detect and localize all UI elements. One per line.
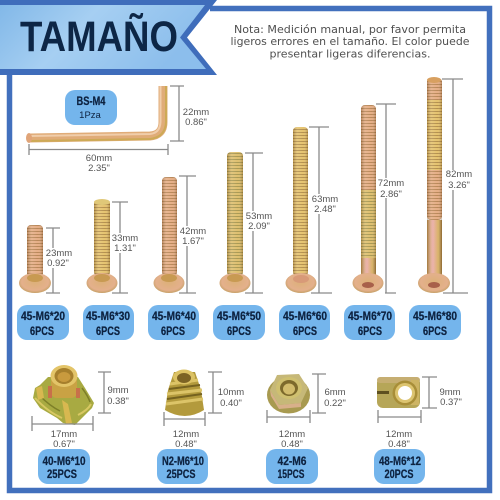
label: N2-M6*10 [157, 449, 208, 484]
dimension cross dowel: 0.48" [388, 439, 410, 450]
label: 45-M6*40 [148, 305, 199, 340]
label: BS-M4: BS-M4 [76, 94, 106, 108]
dimension flange nut [267, 374, 346, 450]
dimension flange nut: 0.48" [281, 439, 303, 450]
label: 45-M6*30 [83, 305, 134, 340]
label: 45-M6*30: 6PCS [96, 324, 120, 338]
label: 45-M6*40: 6PCS [161, 324, 185, 338]
dimension 82mm [442, 79, 473, 293]
dimension 53mm: 2.09" [248, 221, 270, 232]
note text: Nota: Medición manual, por favor permita [234, 24, 466, 36]
label: 45-M6*50 [213, 305, 265, 340]
dimension insert: 10mm [218, 387, 244, 398]
bolt 45-M6*80 [418, 77, 450, 293]
dimension T-nut: 0.67" [53, 439, 75, 450]
dimension T-nut [32, 372, 129, 450]
dimension cross dowel: 12mm [386, 429, 412, 440]
bolt 45-M6*20 [19, 225, 51, 293]
label: 40-M6*10 [38, 449, 90, 484]
bolt 45-M6*40 [154, 177, 184, 293]
icon: cross dowel [377, 377, 420, 408]
dimension 53mm [245, 153, 272, 293]
dimension 23mm [46, 228, 72, 293]
label: 45-M6*30: 45-M6*30 [86, 309, 130, 323]
dimension 82mm: 3.26" [448, 180, 470, 191]
dimension flange nut: 6mm [324, 387, 346, 398]
dimension cross dowel [378, 377, 462, 450]
dimension flange nut: 12mm [279, 429, 305, 440]
label: 45-M6*70: 6PCS [358, 324, 382, 338]
dimension 63mm: 2.48" [314, 204, 336, 215]
dimension: hex key: 2.35" [88, 163, 110, 174]
bolt 45-M6*60 [286, 127, 316, 293]
note text: presentar ligeras diferencias. [270, 48, 430, 60]
label: 45-M6*60: 45-M6*60 [283, 309, 327, 323]
dimension insert: 12mm [173, 429, 199, 440]
dimension: hex key: 60mm [86, 153, 112, 164]
dimension flange nut: 0.22" [324, 398, 346, 409]
label: 40-M6*10: 40-M6*10 [42, 454, 86, 468]
label: 45-M6*20: 45-M6*20 [21, 309, 65, 323]
bolt 45-M6*50 [220, 152, 250, 293]
label: 45-M6*70 [344, 305, 395, 340]
bolt 45-M6*30 [86, 199, 118, 293]
label: 42-M6: 15PCS [278, 467, 304, 481]
title: TAMAÑO [20, 13, 178, 61]
label: 45-M6*50: 6PCS [227, 324, 251, 338]
dimension 53mm: 53mm [246, 211, 272, 222]
label: 45-M6*70: 45-M6*70 [348, 309, 392, 323]
dimension T-nut: 0.38" [107, 396, 129, 407]
label: 45-M6*20: 6PCS [30, 324, 54, 338]
label: BS-M4 [65, 90, 117, 125]
dimension 72mm: 72mm [378, 178, 404, 189]
dimension T-nut: 17mm [51, 429, 77, 440]
dimension 33mm: 33mm [112, 233, 138, 244]
dimension: hex key [29, 86, 209, 174]
icon: threaded insert [165, 370, 204, 416]
dimension: hex key: 22mm [183, 107, 209, 118]
banner [0, 0, 217, 75]
label: 45-M6*20 [17, 305, 69, 340]
label: 42-M6: 42-M6 [278, 454, 307, 468]
label: N2-M6*10: 25PCS [166, 467, 196, 481]
dimension 42mm [179, 176, 206, 293]
dimension insert: 0.40" [220, 398, 242, 409]
dimension 42mm: 42mm [180, 226, 206, 237]
icon: hex key [26, 86, 166, 143]
dimension 42mm: 1.67" [182, 236, 204, 247]
dimension: hex key: 0.86" [185, 117, 207, 128]
label: 48-M6*12: 20PCS [384, 467, 414, 481]
dimension 23mm: 23mm [46, 248, 72, 259]
label: 45-M6*60 [279, 305, 330, 340]
dimension 72mm [376, 104, 404, 293]
dimension 72mm: 2.86" [380, 189, 402, 200]
note text: ligeros errores en el tamaño. El color puede [230, 36, 470, 48]
dimension 82mm: 82mm [446, 169, 472, 180]
label: 45-M6*60: 6PCS [293, 324, 317, 338]
label: 45-M6*40: 45-M6*40 [152, 309, 196, 323]
label: N2-M6*10: N2-M6*10 [162, 454, 204, 468]
dimension 63mm [309, 127, 338, 293]
dimension T-nut: 9mm [107, 385, 129, 396]
label: 45-M6*80: 6PCS [423, 324, 447, 338]
label: 40-M6*10: 25PCS [47, 467, 77, 481]
bolt 45-M6*70 [352, 105, 384, 293]
dimension cross dowel: 0.37" [440, 397, 462, 408]
label: 45-M6*80: 45-M6*80 [413, 309, 457, 323]
label: 42-M6 [266, 449, 318, 484]
dimension 33mm: 1.31" [114, 243, 136, 254]
note text [230, 24, 470, 60]
dimension 23mm: 0.92" [47, 258, 69, 269]
icon: flange nut [267, 374, 310, 414]
dimension cross dowel: 9mm [439, 387, 461, 398]
label: BS-M4: 1Pza [79, 110, 102, 121]
dimension insert: 0.48" [175, 439, 197, 450]
label: 48-M6*12 [374, 449, 425, 484]
dimension insert [164, 372, 244, 450]
icon: T-nut [33, 365, 94, 425]
label: 45-M6*50: 45-M6*50 [217, 309, 261, 323]
label: 45-M6*80 [409, 305, 461, 340]
dimension 63mm: 63mm [312, 194, 338, 205]
label: 48-M6*12: 48-M6*12 [379, 454, 421, 468]
dimension 33mm [112, 202, 138, 293]
